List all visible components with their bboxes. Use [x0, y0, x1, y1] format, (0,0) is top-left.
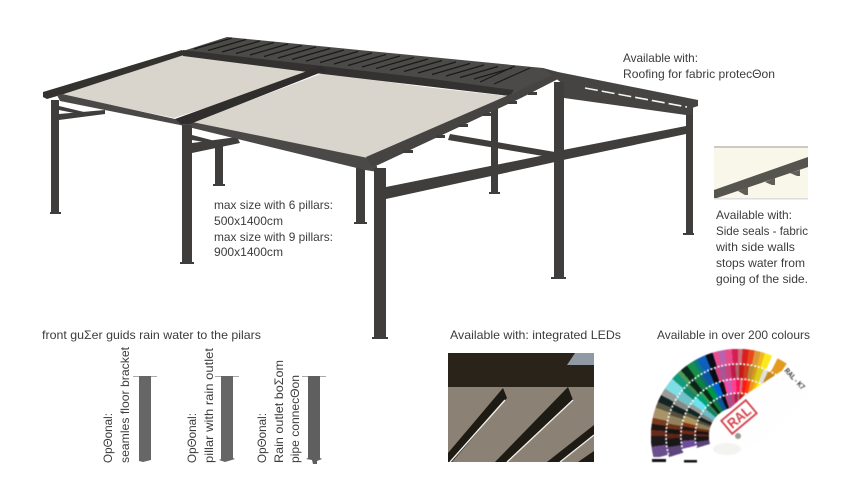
label: max sizes: [214, 198, 333, 259]
optional: pillar with rain outlet: [185, 347, 239, 463]
front gutter: [57, 94, 378, 172]
optional: rain outlet bottom pipe connection: pipe connecΘon: [288, 375, 302, 463]
optional: pillar with rain outlet: pillar with rain outlet: [202, 347, 216, 463]
label: front gutter: front guΣer guids rain water to the pilars: [42, 328, 261, 342]
label: colours: Available in over 200 colours: [657, 328, 810, 342]
label: side seals: going of the side.: [716, 272, 808, 286]
fabric panel left: [62, 55, 315, 118]
optional: rain outlet bottom pipe connection: [255, 360, 326, 464]
optional: rain outlet bottom pipe connection: Rain outlet boΣom: [272, 360, 286, 463]
fan outer band: [650, 348, 788, 458]
label: LEDs: Available with: integrated LEDs: [450, 328, 621, 342]
rivet: [735, 433, 741, 439]
back pillars: [213, 105, 694, 235]
label: roofing option: Roofing for fabric protecΘon: [623, 67, 775, 81]
label: side seals: Side seals - fabric: [716, 224, 808, 238]
label: max sizes: max size with 9 pillars:: [214, 230, 333, 244]
label: max sizes: 500x1400cm: [214, 214, 283, 228]
RAL colour fan: [650, 348, 807, 464]
label: max sizes: 900x1400cm: [214, 245, 283, 259]
right roof gable: [543, 68, 698, 115]
fabric panel right: [190, 73, 520, 158]
label: max sizes: max size with 6 pillars:: [214, 198, 333, 212]
front pillars: [50, 82, 566, 339]
bottom black marks: [652, 459, 697, 462]
rafter stubs: [403, 92, 537, 153]
label: side seals: stops water from: [716, 256, 805, 270]
cross beams: [59, 106, 686, 199]
optional: seamless floor bracket: OpΘonal:: [101, 413, 115, 463]
centre beam: [175, 66, 327, 124]
LED photo: [448, 353, 594, 462]
fan inner band: [694, 392, 746, 448]
label: side seals: with side walls: [715, 240, 795, 254]
optional: pillar with rain outlet: OpΘonal:: [185, 413, 199, 463]
optional: rain outlet bottom pipe connection: OpΘonal:: [255, 413, 269, 463]
pergola frame drawing: [43, 37, 698, 339]
right side beam: [366, 73, 560, 166]
fan overlay: arcs, card and marks: [651, 362, 807, 464]
optional: seamless floor bracket: seamles floor bracket: [118, 346, 132, 463]
label: side seals: Available with:: [716, 208, 792, 222]
label: roofing option: Available with:: [623, 51, 698, 65]
white card: [710, 370, 810, 458]
RAL stamp: RAL: [724, 402, 754, 431]
dotted ring arcs: [666, 364, 778, 455]
side seals photo: [714, 146, 808, 200]
optional: seamless floor bracket: [101, 346, 157, 463]
label: roofing option: [623, 51, 775, 81]
left side beam: [43, 50, 187, 99]
roofing slats over the back: [183, 37, 558, 96]
card shading: [713, 443, 741, 455]
fan third band: [680, 378, 762, 450]
label: side seals: [715, 208, 808, 286]
fan second band: [665, 363, 776, 458]
card label: RAL - K7: [783, 366, 807, 391]
back beam: [183, 50, 514, 96]
